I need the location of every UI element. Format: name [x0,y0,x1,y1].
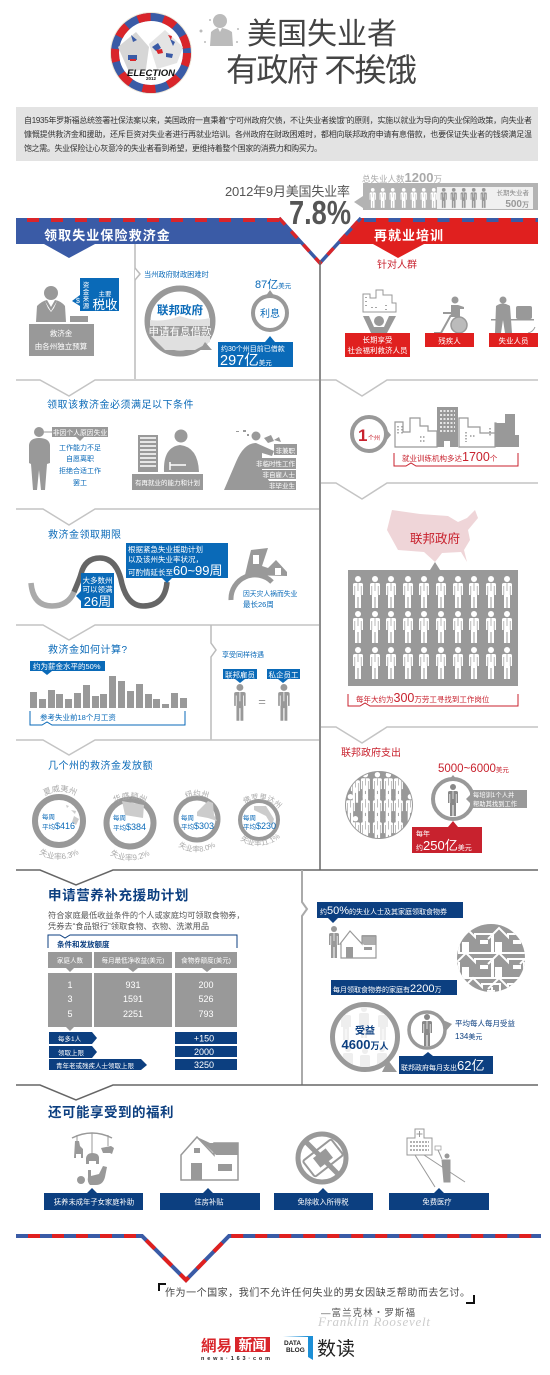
panel: target groups: 针对人群 [377,258,417,271]
icon: no tax sign [298,1134,346,1182]
table [48,952,237,1070]
panel: federal loans [144,270,293,369]
divider: training bodies [321,380,538,396]
logo: NetEase news [201,1337,270,1362]
divider: federal [321,483,538,499]
quote: 作为一个国家，我们不允许任何失业的男女因缺乏帮助而去乞讨。 [165,1286,470,1299]
zigzag divider [16,1236,541,1280]
icon: person and house [329,926,376,958]
divider: other benefits [16,1085,538,1100]
icon: welfare recipient: 社会福利救济人员 [348,345,408,355]
state: Florida: 平均$230 [243,821,276,831]
panel: training institutions [352,407,519,466]
chart: winding road [31,558,167,606]
ring: per state [352,417,391,451]
title: 美国失业者 [247,18,397,51]
benefit: child support: 抚养未成年子女家庭补助 [54,1198,134,1206]
ring: monthly per person [409,1012,515,1048]
divider: calculation [16,625,319,640]
label: about half of wages: 约为薪金水平的50% [33,661,101,671]
icon: wheelchair: 残疾人 [438,336,461,346]
attribution and signature: Franklin Roosevelt [317,1314,430,1329]
callout: 60 to 99 weeks: 根据紧急失业援助计划 [128,544,203,554]
state: Florida [238,794,282,846]
ring: federal government loan: 申请有息借款 [148,325,212,338]
callout: 26 weeks: 可以领满 [82,584,113,594]
panel: SNAP program: 凭券去“食品银行”领取食物、衣物、洗漱用品 [48,921,209,931]
table: 3 [67,994,73,1004]
ring: interest [253,278,292,330]
table: 2251 [123,1009,143,1019]
ring: monthly per person: 134美元 [455,1032,482,1041]
benefit: child support [44,1133,143,1210]
bracket: 3 million workers: 每年大约为300万劳工寻找到工作岗位 [356,691,490,705]
table: 3250 [194,1060,214,1070]
callout: funding source: 源 [83,301,90,310]
condition: able and planning to work: 有再就业的能力和计划 [135,478,200,487]
intro text panel: 饱之需。失业保险让心灰意冷的失业者看到希望，更维持着整个国家的消费力和购买力。 [24,143,322,153]
panel: state budget [29,244,140,379]
equals sign: = [258,694,266,709]
houses circle [457,924,525,992]
icon: businessman [200,14,239,46]
condition: not part-time etc [224,430,297,490]
state: Washington: 每周 [113,813,126,822]
unemployment rate headline: 7.8% [289,194,351,231]
banner: re-employment training [338,218,538,258]
condition: not part-time etc: 非毕业生 [269,481,296,490]
attribution and signature: —富兰克林・罗斯福 [321,1307,415,1319]
callout: funding source: 来 [83,295,90,303]
callout: federal monthly spending [399,1052,493,1074]
table: 家庭人数 [57,956,84,964]
ring: 46 million beneficiaries [332,1004,398,1080]
panel: how benefit is calculated: 救济金如何计算? [48,643,128,656]
callout: 60 to 99 weeks: 可酌情延长至60~99周 [128,563,223,578]
bracket: 18 months of wages: 参考失业前18个月工资 [40,712,116,722]
callout: federal monthly spending: 联邦政府每月支出62亿 [401,1058,484,1073]
state: Hawaii: 夏威夷州 [42,784,78,796]
icon: disaster [231,548,298,609]
table: 931 [125,980,141,990]
table: 793 [198,1009,214,1019]
divider: duration [16,509,319,525]
callout: funding source [72,278,119,312]
V divider at the top [279,218,361,263]
ring: interest: 87亿美元 [255,278,292,291]
condition: not part-time etc: 非自雇人士 [262,470,296,479]
table: 2000 [194,1047,214,1057]
unemployed totals: 总失业人数1200万 [362,170,442,185]
state: Hawaii: 失业率6.3% [39,848,78,860]
state: Washington: 平均$384 [113,822,146,832]
condition: lost job not by own fault: 自愿离职 [66,454,94,463]
logo: NetEase news: 網易 [201,1337,232,1355]
callout: 26 weeks: 26周 [84,594,111,609]
logo: election 2012 badge [110,12,192,94]
logo: election 2012 badge: 2012 [146,76,157,81]
callout: 50 percent: 约50%的失业人士及其家庭领取食物券 [320,905,447,917]
attribution and signature [317,1307,430,1329]
panel: eligibility conditions [29,398,297,490]
benefit: housing subsidy [160,1137,260,1210]
callout: funding source: 主要 [98,289,112,298]
condition: not part-time etc: 非兼职 [276,446,296,455]
state: Hawaii: 每周 [42,812,55,821]
callout: funding source: 税收 [92,298,118,312]
ring: per state: 个州 [368,435,380,442]
bracket: 1700 institutions [394,450,518,466]
bar chart: wages [30,676,187,708]
unemployment rate headline: 2012年9月美国失业率 [225,184,350,199]
icon: hospital [407,1129,465,1187]
state: New York: 失业率8.0% [178,842,216,852]
panel: federal spending [341,746,527,853]
state: Washington: 失业率9.2% [110,850,150,862]
bracket: 18 months of wages [30,711,185,725]
table: 200 [198,980,214,990]
condition: lost job not by own fault: 罢工 [73,479,87,487]
panel: target groups [345,258,538,357]
icon: disaster: 最长26周 [243,599,274,609]
ring: 46 million beneficiaries: 4600万人 [342,1037,388,1052]
callout: 25 billion per year [412,821,482,853]
callout: 60 to 99 weeks: 以及该州失业率状况， [128,554,203,564]
callout: loans to date: 约30个州目前已借款 [221,344,285,353]
bracket: conditions and amounts [48,935,237,949]
callout: 60 to 99 weeks [126,543,228,583]
icon: welfare recipient [345,290,410,357]
ring: monthly per person: 平均每人每月受益 [455,1018,515,1028]
divider: food stamps [16,870,538,885]
unemployed totals [354,170,538,210]
panel: federal government job placement [348,510,518,706]
table: 青年老或残疾人士领取上限 [56,1061,134,1070]
ring: 46 million beneficiaries: 受益 [355,1024,375,1037]
banner: unemployment insurance [16,218,302,258]
panel: benefit duration: 救济金领取期限 [48,528,122,541]
private employee: 私企员工 [268,670,299,680]
table: 526 [198,994,214,1004]
logo: NetEase news: news·163·com [201,1356,270,1362]
condition: lost job not by own fault: 拒绝合适工作 [59,466,101,475]
icon: clerk at desk: 救济金 [50,328,73,338]
panel: SNAP statistics [302,870,550,1085]
divider: spending [321,727,538,743]
table: 领取上限 [58,1048,84,1057]
logo: data blog: BLOG [286,1347,305,1354]
map: United States [387,510,478,562]
logo: data blog: DATA [284,1340,301,1347]
table: 食物券额度(美元) [181,956,231,964]
callout: funding source: 金 [83,287,90,296]
people grid [348,562,518,686]
icon: welfare recipient: 长期享受 [362,334,393,344]
icon: clerk at desk [29,286,94,356]
panel: same treatment: 享受同样待遇 [222,650,264,659]
logo: NetEase news: 新闻 [238,1337,266,1353]
panel: how benefit is calculated [30,643,187,725]
callout: 25 billion per year: 每年 [416,829,430,838]
table: 1 [67,980,73,990]
condition: able and planning to work [132,430,203,490]
state: Hawaii [32,784,86,860]
ring: cost per person: 帮助其找到工作 [473,799,518,808]
ring: federal government loan [148,288,212,354]
panel: federal loans: 当州政府财政困难时 [144,270,209,279]
panel: federal spending: 联邦政府支出 [341,746,401,759]
divider: states [16,740,319,755]
icon: unemployed on bench [489,296,538,347]
state: Washington: 华盛顿州 [113,792,148,803]
panel: benefits by state [32,759,282,862]
benefit: income tax exemption: 免除收入所得税 [297,1198,349,1206]
state: Florida: 每周 [243,813,256,822]
logo: data blog [283,1336,355,1360]
callout: funding source: $ [76,298,80,305]
divider: conditions [16,380,319,396]
icon: clerk at desk: 由各州独立预算 [35,341,88,351]
condition: lost job not by own fault [29,427,108,490]
state: Florida: 佛罗里达州 [244,794,282,808]
map: United States: 联邦政府 [410,531,460,546]
condition: lost job not by own fault: 工作能力不足 [59,443,101,452]
ring: cost per person: 5000~6000美元 [438,763,509,775]
title: 有政府 不挨饿 [226,52,417,88]
unemployed totals: 长期失业者 [496,188,530,197]
callout: 50 percent [317,902,463,923]
table: 5 [67,1009,73,1019]
table: 1591 [123,994,143,1004]
state: New York: 纽约州 [185,790,209,798]
icon: baby mobile [72,1133,114,1185]
unemployment rate headline [225,184,351,231]
banner: unemployment insurance: 领取失业保险救济金 [44,228,171,243]
panel: SNAP program: 申请营养补充援助计划 [48,887,189,903]
ring: cost per person: 每培训1个人并 [473,790,514,799]
ring: per state: 1 [358,426,367,445]
state: New York [174,790,220,852]
federal employee: 联邦雇员 [225,670,255,680]
callout: loans to date: 297亿美元 [220,352,272,369]
callout: 22 million households: 每月领取食物券的家庭有2200万 [333,983,441,995]
logo: election 2012 badge: ELECTION [127,68,176,79]
panel: benefits by state: 几个州的救济金发放额 [48,759,153,772]
heading: other benefits: 还可能享受到的福利 [48,1104,174,1120]
table: 每多1人 [58,1034,82,1043]
state: Washington [104,792,156,862]
ring: federal government loan: 联邦政府 [157,303,203,317]
title [226,18,417,88]
benefit: free healthcare [389,1129,489,1210]
state: Florida: 失业率11.1% [240,834,280,846]
condition: not part-time etc: 非临时性工作 [256,459,296,468]
state: Hawaii: 平均$416 [42,821,75,831]
benefit: housing subsidy: 住房补贴 [194,1198,224,1206]
callout: 26 weeks [76,573,114,609]
condition: lost job not by own fault: 非因个人原因失业 [53,428,107,437]
quote [159,1284,474,1303]
panel: SNAP program: 符合家庭最低收益条件的个人或家庭均可领取食物券， [48,910,245,920]
table: +150 [194,1034,214,1044]
logo: data blog: 数读 [317,1338,355,1360]
state: New York: 平均$303 [181,821,214,831]
intro text panel: 慷慨提供救济金和援助，还斥巨资对失业者进行再就业培训。各州政府在财政困难时，都相向联邦政府申请有息借款，也要保证失业者的钱袋满足温 [24,129,532,139]
benefit: income tax exemption [274,1134,373,1210]
bracket: 1700 institutions: 就业训练机构多达1700个 [402,450,498,464]
callout: funding source: 资 [83,280,90,289]
table: 每月最低净收益(美元) [102,956,164,964]
icon: disaster: 因天灾人祸而失业 [243,589,298,598]
panel: same treatment [211,625,300,740]
icon: house [181,1137,238,1180]
unemployed totals: 500万 [505,199,529,210]
ring: cost per person [433,763,527,819]
banner: re-employment training: 再就业培训 [374,228,444,243]
intro text panel: 自1935年罗斯福总统签署社保法案以来，美国政府一直秉着“宁可州政府欠债，不让失业者挨饿”的原则，实施以就业为导向的失业保险政策，向失业者 [24,115,532,125]
panel: SNAP program [48,887,245,1070]
icon: unemployed on bench: 失业人员 [498,336,529,346]
state: New York: 每周 [181,813,194,822]
icon: city skyline [395,407,519,447]
people circle [345,771,413,839]
label: about half of wages [30,661,105,675]
callout: 26 weeks: 大多数州 [82,575,112,585]
ring: interest: 利息 [260,307,280,320]
panel: eligibility conditions: 领取该救济金必须满足以下条件 [47,398,194,411]
callout: 25 billion per year: 约250亿美元 [416,838,472,853]
benefit: free healthcare: 免费医疗 [422,1198,452,1206]
intro text panel [16,107,538,161]
icon: wheelchair [425,296,474,347]
panel: benefit duration [31,528,298,609]
callout: loans to date [218,336,293,369]
callout: 22 million households [331,980,457,995]
bracket: conditions and amounts: 条件和发放额度 [57,939,110,949]
